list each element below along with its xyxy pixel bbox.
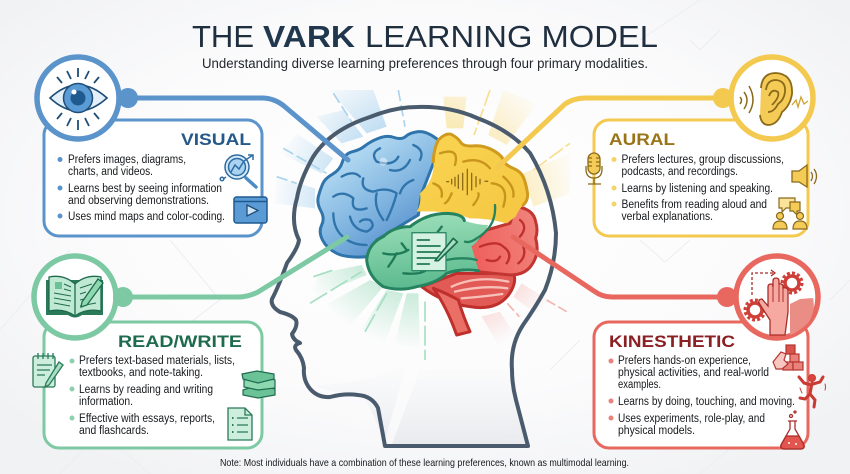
panel: kinesthetic [594, 322, 826, 449]
icon: stack of books [242, 371, 275, 398]
bullet list: kinesthetic: Uses experiments, role-play, and [618, 413, 765, 425]
bullet list: kinesthetic [608, 355, 795, 437]
brain [318, 132, 537, 335]
icon: video player [234, 197, 267, 223]
icon badge: eye [37, 57, 138, 139]
bullet list: read/write: and flashcards. [79, 425, 149, 437]
neck shading [312, 363, 525, 444]
bullet list: read/write: information. [79, 396, 133, 408]
bullet list: kinesthetic: physical activities, and real-world [618, 367, 769, 379]
connector: visual [128, 98, 348, 160]
heading: kinesthetic: KINESTHETIC [609, 332, 735, 351]
bullet list: kinesthetic: Learns by doing, touching, and moving. [618, 396, 795, 408]
bullet list: read/write [70, 355, 235, 437]
icon: document [228, 408, 252, 440]
head outline [272, 107, 556, 446]
icon: microphone [586, 153, 602, 184]
heading: visual: VISUAL [181, 130, 251, 149]
brain: aural lobe [417, 134, 528, 223]
panel: aural [586, 120, 816, 236]
brain: cerebellum and stem [422, 273, 515, 335]
bullet list: visual: Learns best by seeing information [68, 183, 222, 195]
bullet list: aural [612, 154, 784, 223]
bullet list: kinesthetic: examples. [618, 379, 661, 391]
head and brain illustration [272, 90, 570, 446]
brain: visual lobe [318, 132, 438, 257]
bullet list: aural: Prefers lectures, group discussions, [622, 154, 784, 166]
bullet list: visual: Uses mind maps and color-coding. [68, 211, 225, 223]
bullet list: kinesthetic: physical models. [618, 425, 695, 437]
icon: notepad [33, 353, 63, 387]
bullet list: visual: Prefers images, diagrams, [68, 154, 186, 166]
connector: read/write [123, 237, 347, 297]
light rays [273, 90, 570, 360]
connector: kinesthetic [513, 237, 727, 297]
heading: aural: AURAL [609, 130, 675, 149]
panel: visual [44, 120, 267, 236]
icon: chat and people [773, 198, 807, 229]
bullet list: visual: charts, and videos. [68, 166, 153, 178]
icon: magnifying glass chart [220, 155, 256, 187]
heading: read/write: READ/WRITE [118, 332, 242, 351]
icon: speaker [792, 165, 816, 187]
bullet list: read/write: Effective with essays, reports, [79, 413, 215, 425]
title: LEARNING MODEL [365, 20, 658, 54]
title: VARK [263, 20, 355, 54]
icon: running person [799, 374, 826, 407]
connector: aural [497, 98, 723, 168]
icon badge: ear [713, 57, 813, 139]
bullet list: read/write: Learns by reading and writing [79, 384, 213, 396]
brain: kinesthetic lobe [470, 207, 537, 275]
bullet list: visual: and observing demonstrations. [68, 195, 209, 207]
bullet list: aural: Benefits from reading aloud and [622, 199, 767, 211]
icon badge: open book [34, 256, 133, 338]
bullet list: aural: verbal explanations. [622, 211, 713, 223]
bullet list: read/write: Prefers text-based materials, lists, [79, 355, 235, 367]
bullet list: aural: Learns by listening and speaking. [622, 183, 773, 195]
bullet list: visual [58, 154, 225, 223]
subtitle: Understanding diverse learning preferences through four primary modalities. [202, 56, 648, 71]
panel: read/write [33, 322, 275, 448]
bullet list: aural: podcasts, and recordings. [622, 166, 738, 178]
icon: hand and blocks [773, 345, 803, 370]
icon badge: hand and gears [717, 256, 818, 338]
brain: read/write lobe [367, 205, 495, 289]
icon: note and pencil on brain [412, 233, 457, 271]
bullet list: read/write: textbooks, and note-taking. [79, 367, 203, 379]
title: THE [192, 20, 254, 54]
icon: flask [781, 411, 804, 449]
title [192, 20, 658, 54]
bullet list: kinesthetic: Prefers hands-on experience, [618, 355, 751, 367]
footnote: Note: Most individuals have a combination of these learning preferences, known as multimodal learning. [220, 457, 629, 469]
